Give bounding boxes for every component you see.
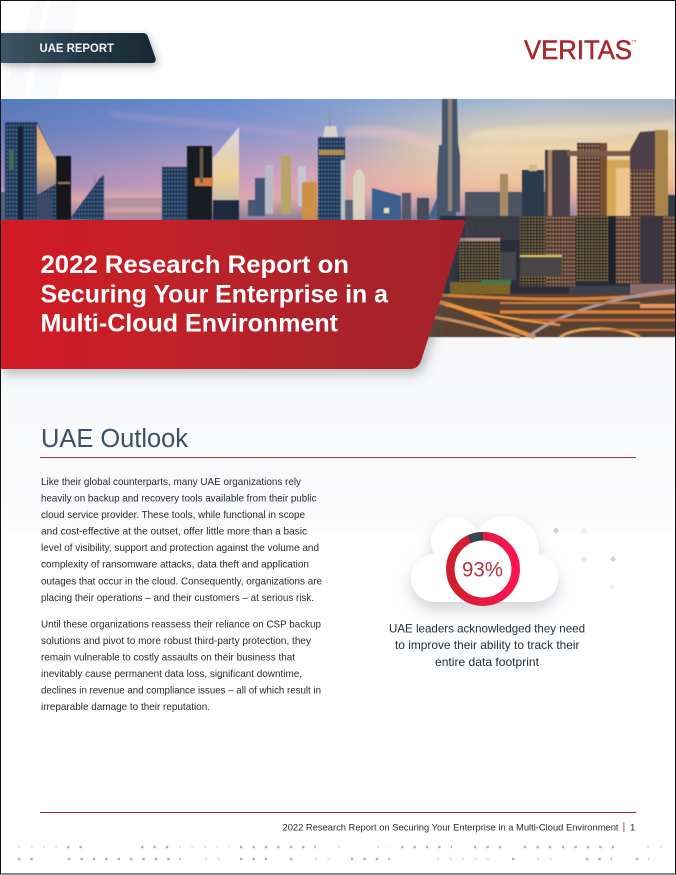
footer: 1 <box>630 822 635 834</box>
text block: body copy: heavily on backup and recovery tools available from their public <box>41 494 316 504</box>
donut chart: 93%: 93% <box>462 558 503 582</box>
text block: body copy: Like their global counterparts, many UAE organizations rely <box>41 477 302 488</box>
footer <box>40 812 636 834</box>
decorative streaks at the top left <box>1 1 80 99</box>
footer dot rows <box>18 847 662 859</box>
donut chart: 93% <box>450 536 516 602</box>
hero: lower district <box>420 216 676 337</box>
title <box>40 251 389 338</box>
text block: body copy: solutions and pivot to more robust third-party protection, they <box>41 636 312 647</box>
text block: body copy: complexity of ransomware attacks, data theft and application <box>41 560 309 570</box>
text block: body copy: irreparable damage to their reputation. <box>41 702 210 713</box>
title: Securing Your Enterprise in a <box>40 280 389 308</box>
background: pale page tint <box>0 337 676 534</box>
hero photo: Dubai skyline <box>0 99 676 337</box>
text block: body copy: and cost-effective at the outset, offer little more than a basic <box>41 526 307 538</box>
title banner <box>0 220 465 369</box>
heading: UAE Outlook: UAE Outlook <box>41 425 188 453</box>
title: 2022 Research Report on <box>40 251 349 279</box>
text block: body copy: declines in revenue and compliance issues – all of which result in <box>41 686 321 696</box>
title: Multi-Cloud Environment <box>40 310 339 338</box>
text block: body copy: placing their operations – and their customers – at serious risk. <box>41 593 314 604</box>
callout: 93% caption: entire data footprint <box>435 656 540 669</box>
text block: body copy: Until these organizations reassess their reliance on CSP backup <box>41 620 321 630</box>
text block: body copy: remain vulnerable to costly assaults on their business that <box>41 652 295 664</box>
badge: UAE REPORT <box>0 33 156 63</box>
text block: body copy: inevitably cause permanent data loss, significant downtime, <box>41 669 302 680</box>
icon: cloud <box>411 516 558 602</box>
logo: Veritas: TM <box>632 39 637 43</box>
badge: UAE REPORT: UAE REPORT <box>40 41 115 55</box>
logo: Veritas: VERITAS <box>524 35 632 65</box>
callout: 93% caption: UAE leaders acknowledged they need <box>389 622 585 636</box>
text block: body copy: outages that occur in the cloud. Consequently, organizations are <box>41 576 322 588</box>
text block: body copy: cloud service provider. These tools, while functional in scope <box>41 510 305 521</box>
callout: 93% caption <box>389 622 585 669</box>
text block: body copy <box>41 477 322 713</box>
text block: body copy: level of visibility, support and protection against the volume and <box>41 543 319 554</box>
icon: scattered diamonds <box>553 528 616 590</box>
callout: 93% caption: to improve their ability to track their <box>395 639 580 652</box>
footer: 2022 Research Report on Securing Your Enterprise in a Multi-Cloud Environment <box>282 822 619 834</box>
